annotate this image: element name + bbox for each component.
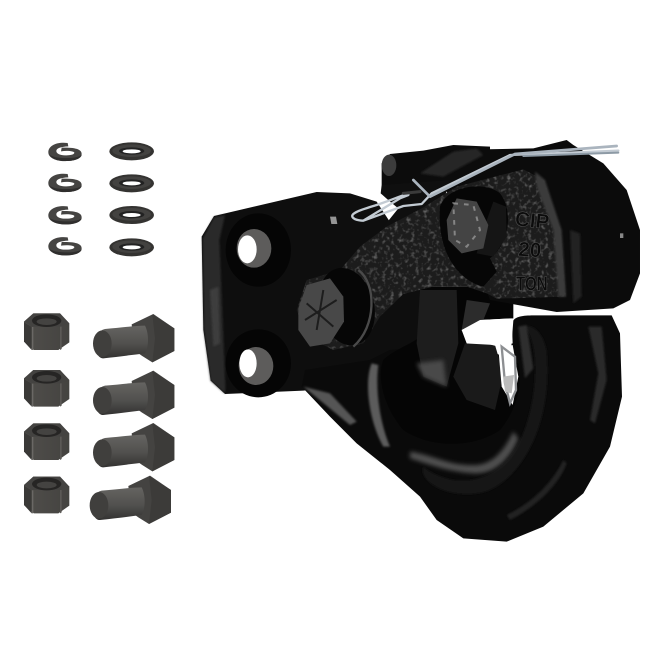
hook body	[302, 315, 622, 542]
embossed casting text	[514, 208, 551, 296]
mounting hardware set	[24, 142, 174, 524]
flat washers	[109, 142, 154, 256]
embossed casting text: 20	[518, 238, 542, 262]
top hinge pin	[375, 145, 490, 237]
mounting hole: lower	[226, 329, 291, 397]
spring clip: silver wire	[352, 146, 618, 221]
embossed casting text: CIP	[514, 208, 551, 234]
cap casting	[443, 140, 640, 312]
mounting plate	[202, 192, 430, 397]
hook throat and latch pin	[381, 287, 520, 444]
latch arm casting	[297, 169, 566, 350]
pintle hook assembly	[202, 140, 640, 542]
pivot bolt and washer	[298, 262, 383, 351]
hex nuts	[24, 313, 69, 513]
lock washers	[48, 143, 82, 255]
mounting hole: upper	[226, 213, 291, 287]
embossed casting text: TON	[516, 273, 548, 296]
latch bolt in recess	[440, 186, 508, 287]
hex bolts	[90, 314, 174, 524]
